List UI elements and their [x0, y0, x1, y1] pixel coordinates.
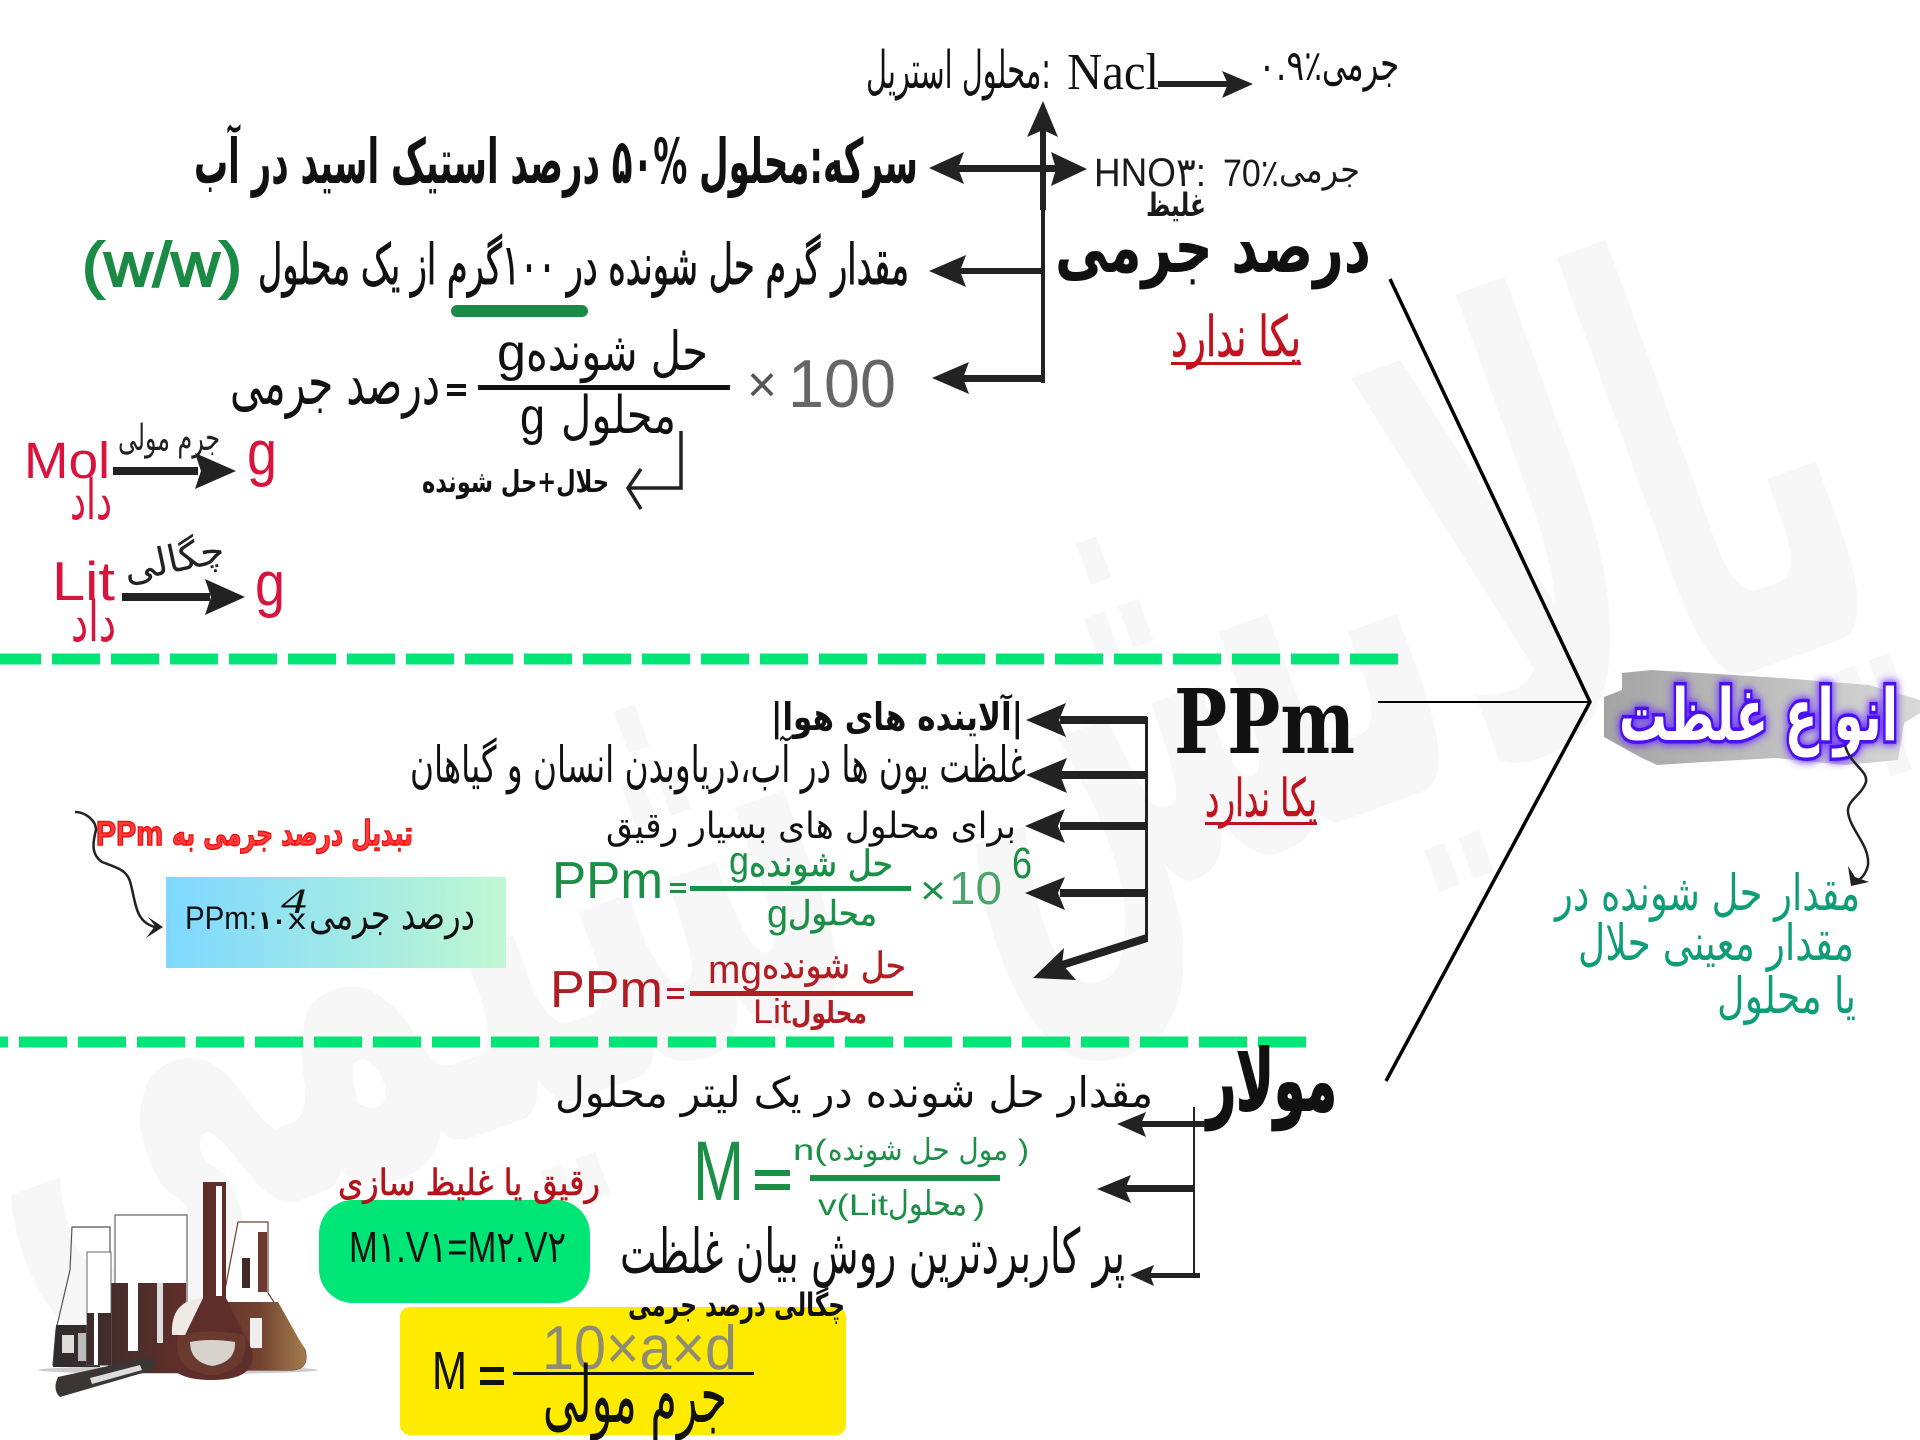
heading: mass percent: درصد جرمی: [1055, 205, 1371, 290]
molarity formula: ): [1018, 1134, 1029, 1167]
trunk and arrows: [1025, 703, 1148, 980]
icon: lab glassware: [38, 1182, 318, 1397]
hook arrow: [628, 431, 681, 509]
nitric acid example: جرمی: [1279, 150, 1360, 191]
conversion heading: PPm: [96, 815, 163, 853]
formula: mass percent: g: [497, 324, 526, 382]
molarity formula: ): [973, 1189, 985, 1222]
formula: mass percent: [230, 320, 896, 446]
dilution formula: M۱.V۱=M۲.V۲: [349, 1223, 566, 1272]
conversion formula: PPm:: [185, 900, 257, 936]
conversion formula: [185, 881, 475, 939]
molarity formula: مول حل شونده: [828, 1133, 1008, 1168]
green underline: [451, 305, 588, 317]
definition: مقدار گرم حل شونده در ۱۰۰گرم از یک محلول: [258, 233, 909, 298]
sterile solution example: Nacl: [1067, 44, 1159, 101]
nitric acid example: HNO۳:: [1094, 151, 1206, 195]
sterile solution example: محلول استریل:: [866, 41, 1051, 101]
molarity formula: محلول: [888, 1184, 967, 1224]
no unit note: [1171, 305, 1301, 370]
green ppm formula: g: [729, 839, 749, 883]
curved arrow: [75, 812, 163, 938]
red ppm formula: [550, 946, 913, 1031]
red ppm formula: محلول: [791, 996, 867, 1031]
most used note: پر کاربردترین روش بیان غلظت: [620, 1215, 1125, 1288]
conversion heading: [96, 814, 413, 854]
liter to gram conversion: g: [255, 550, 285, 619]
air pollutants: ‏|آلاینده های هوا|‏: [771, 693, 1023, 740]
sterile solution example: جرمی: [1322, 36, 1399, 92]
heading molar: مولار: [1205, 1032, 1337, 1131]
green ppm formula: محلول: [788, 894, 877, 934]
green ppm formula: 10: [949, 862, 1002, 914]
red ppm formula: mg: [708, 948, 762, 992]
concentration conversion formula: جرم مولی: [543, 1351, 727, 1440]
dilute solutions: برای محلول های بسیار رقیق: [606, 806, 1016, 847]
liter to gram conversion: [52, 527, 285, 655]
formula: mass percent: درصد جرمی: [230, 346, 440, 419]
green ppm formula: حل شونده: [749, 844, 893, 885]
panel: mass percent: [24, 36, 1399, 655]
density mass percent label: چگالی درصد جرمی: [628, 1286, 845, 1324]
concentration conversion formula: 10×a×d: [542, 1314, 737, 1383]
conversion formula: درصد جرمی: [309, 890, 475, 939]
panel: molarity: [319, 1032, 1337, 1440]
conversion formula: x: [288, 903, 306, 936]
definition text: یا محلول: [1717, 967, 1856, 1025]
branch lines from title: [1378, 279, 1590, 1081]
trunk and arrows: [1097, 1107, 1205, 1286]
red ppm formula: PPm: [550, 961, 663, 1019]
concentration conversion formula: M: [432, 1341, 467, 1401]
red ppm formula: Lit: [753, 993, 792, 1031]
squiggle arrow: [1845, 745, 1869, 886]
ion concentration: غلظت یون ها در آب،دریاوبدن انسان و گیاهان: [410, 735, 1026, 795]
liter to gram conversion: Lit: [52, 550, 115, 612]
conversion heading: تبدیل درصد جرمی به: [172, 814, 413, 854]
concentration conversion formula: [432, 1314, 754, 1440]
molarity formula: M: [693, 1124, 744, 1218]
solvent plus solute: حلال+حل شونده: [422, 465, 609, 500]
nitric acid example: غلیظ: [1146, 186, 1206, 224]
mol to gram conversion: g: [247, 419, 277, 488]
formula: mass percent: ×: [747, 356, 777, 414]
dashed divider bottom: [0, 1036, 1306, 1048]
red ppm formula: حل شونده: [762, 946, 906, 987]
mol to gram conversion: Mol: [24, 432, 110, 489]
green ppm formula: [552, 839, 1032, 936]
panel: ppm: [75, 669, 1355, 1031]
dilution label: رقیق یا غلیظ سازی: [338, 1163, 600, 1204]
nitric acid example: 70٪: [1223, 153, 1279, 195]
green ppm formula: PPm: [552, 852, 663, 910]
vinegar example: سرکه:محلول %۵۰ درصد استیک اسید در آب: [194, 123, 918, 198]
molarity formula: [693, 1124, 1029, 1224]
formula: mass percent: g: [520, 388, 545, 446]
formula: mass percent: محلول: [561, 386, 676, 446]
liter to gram conversion: چگالی: [119, 527, 228, 591]
dashed divider top: [0, 654, 1398, 664]
sterile solution example: ۰.۹٪: [1258, 41, 1322, 90]
no unit note: یکا ندارد: [1171, 305, 1301, 370]
green ppm formula: 6: [1012, 839, 1032, 888]
formula: mass percent: 100: [788, 346, 896, 422]
no unit note: [1205, 769, 1317, 829]
formula: mass percent: حل شونده: [526, 320, 708, 383]
mol to gram conversion: داد: [70, 468, 112, 533]
conversion box: [166, 877, 506, 968]
sterile solution example: [866, 36, 1399, 101]
molarity formula: v(Lit: [818, 1189, 889, 1222]
yellow box: [400, 1307, 846, 1435]
w/w label: (w/w): [82, 231, 242, 300]
nitric acid example: [1094, 150, 1360, 224]
mol to gram conversion: [24, 418, 277, 533]
conversion formula: 4: [281, 881, 307, 921]
conversion formula: ۱۰: [258, 906, 286, 936]
liter to gram conversion: داد: [71, 590, 116, 655]
green dilution box: [319, 1200, 590, 1303]
trunk and arrows: [929, 101, 1087, 394]
molar definition: مقدار حل شونده در یک لیتر محلول: [555, 1068, 1153, 1117]
gray brush: [1604, 670, 1920, 765]
green ppm formula: ×: [920, 869, 946, 913]
definition text: [1553, 864, 1860, 1025]
panel: title: [1553, 670, 1920, 1025]
green ppm formula: g: [767, 892, 788, 936]
molarity formula: n(: [793, 1134, 827, 1167]
heading ppm: PPm: [1174, 669, 1355, 774]
mol to gram conversion: جرم مولی: [118, 418, 220, 459]
no unit note: یکا ندارد: [1205, 769, 1317, 829]
